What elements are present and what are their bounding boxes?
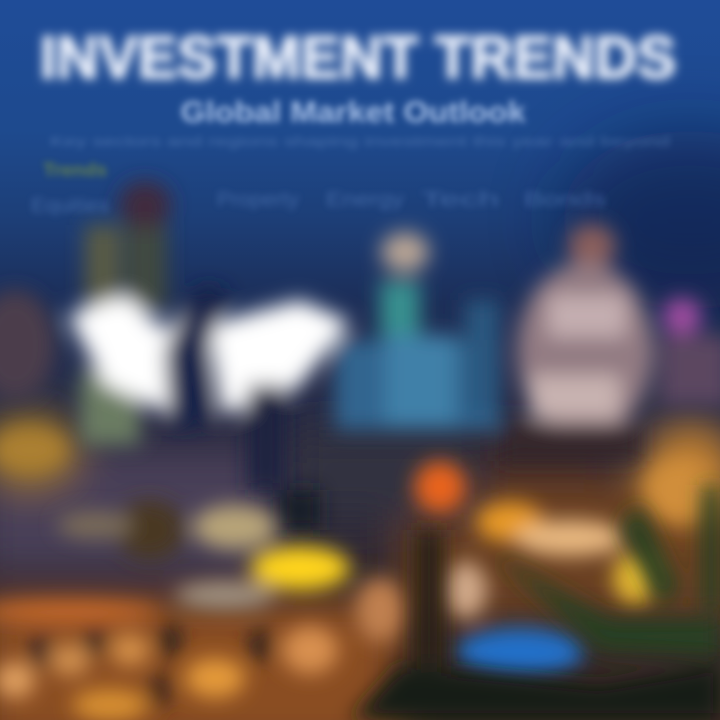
base of city and warm ground: [0, 410, 720, 720]
category labels row: Property: [217, 189, 299, 211]
foreground palm silhouette: [350, 485, 720, 720]
sky shading on right side: [560, 130, 720, 310]
skyline: city silhouettes and towers: [0, 181, 720, 530]
city lights: warm foreground highlights: [0, 428, 716, 720]
category labels row: [31, 160, 606, 217]
category labels row: Energy: [326, 189, 404, 211]
subtitle: Global Market Outlook: [180, 96, 526, 129]
category labels row: Trends: [43, 160, 107, 180]
category labels row: Bonds: [524, 189, 606, 211]
category labels row: Equities: [31, 195, 109, 217]
category labels row: Tech: [421, 189, 499, 211]
title: INVESTMENT TRENDS: [40, 24, 676, 91]
intro text line: Key sectors and regions shaping investment this year and beyond: [50, 133, 670, 149]
